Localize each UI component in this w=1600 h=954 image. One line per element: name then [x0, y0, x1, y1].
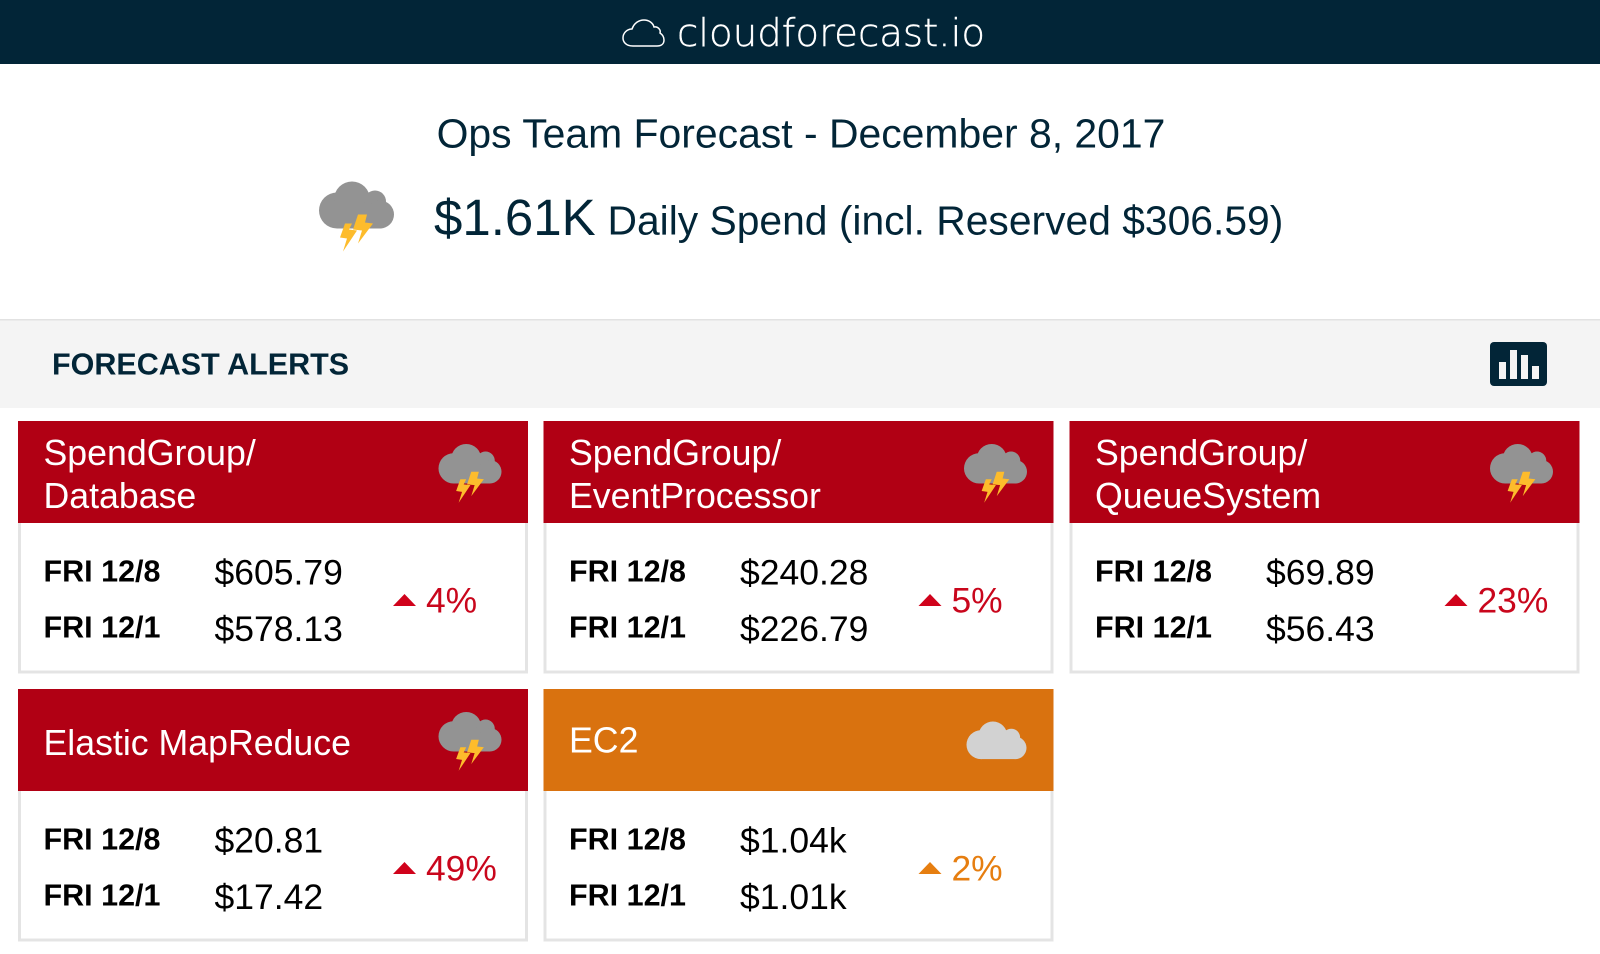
icon: storm cloud: [319, 182, 394, 252]
previous row: $17.42: [214, 877, 323, 917]
current row: FRI 12/8: [569, 822, 686, 856]
current row: $69.89: [1266, 552, 1375, 592]
icon: storm cloud: [964, 444, 1027, 503]
current row: FRI 12/8: [44, 554, 161, 588]
spend description: Daily Spend (incl. Reserved $306.59): [608, 198, 1283, 244]
previous row: $1.01k: [740, 877, 847, 917]
panel: SpendGroup/Database: [18, 421, 528, 672]
icon: storm cloud: [438, 444, 502, 503]
daily spend summary: [319, 182, 1283, 252]
previous row: FRI 12/1: [44, 878, 161, 912]
change percent: 49%: [426, 848, 497, 888]
card title: SpendGroup/: [569, 433, 781, 473]
forecast alerts band: [0, 319, 1600, 408]
current row: FRI 12/8: [44, 822, 161, 856]
icon: storm cloud: [1490, 444, 1553, 503]
previous row: $226.79: [740, 609, 868, 649]
change arrow: [393, 862, 416, 874]
change percent: 2%: [952, 848, 1003, 888]
icon: bar chart: [1490, 342, 1547, 386]
current row: $20.81: [214, 820, 323, 860]
logo wordmark: cloudforecast.io: [677, 11, 985, 55]
change percent: 4%: [426, 580, 477, 620]
current row: FRI 12/8: [569, 554, 686, 588]
change percent: 5%: [952, 580, 1003, 620]
previous row: $56.43: [1266, 609, 1375, 649]
current row: $605.79: [214, 552, 343, 592]
previous row: FRI 12/1: [1095, 610, 1212, 644]
previous row: $578.13: [214, 609, 343, 649]
previous row: FRI 12/1: [569, 878, 686, 912]
current row: FRI 12/8: [1095, 554, 1212, 588]
panel: SpendGroup/QueueSystem: [1070, 421, 1580, 672]
change arrow: [393, 594, 416, 606]
change arrow: [918, 862, 942, 874]
change arrow: [1444, 594, 1468, 606]
icon: logo cloud: [623, 20, 664, 46]
title: Ops Team Forecast - December 8, 2017: [437, 110, 1165, 156]
card title: Elastic MapReduce: [44, 723, 351, 763]
header bar: [0, 0, 1600, 64]
current row: $1.04k: [740, 820, 847, 860]
change percent: 23%: [1478, 580, 1548, 620]
card title: EventProcessor: [569, 476, 821, 516]
card title: SpendGroup/: [44, 433, 256, 473]
icon: storm cloud: [438, 712, 502, 771]
current row: $240.28: [740, 552, 868, 592]
card title: EC2: [569, 720, 638, 760]
card title: Database: [44, 476, 196, 516]
panel: SpendGroup/EventProcessor: [544, 421, 1054, 672]
change arrow: [918, 594, 942, 606]
card title: SpendGroup/: [1095, 433, 1307, 473]
card title: QueueSystem: [1095, 476, 1321, 516]
spend amount: $1.61K: [434, 189, 596, 246]
icon: cloud: [966, 722, 1026, 759]
panel: Elastic MapReduce: [18, 689, 528, 940]
section heading: FORECAST ALERTS: [52, 348, 349, 382]
previous row: FRI 12/1: [569, 610, 686, 644]
previous row: FRI 12/1: [44, 610, 161, 644]
panel: EC2: [544, 689, 1054, 940]
